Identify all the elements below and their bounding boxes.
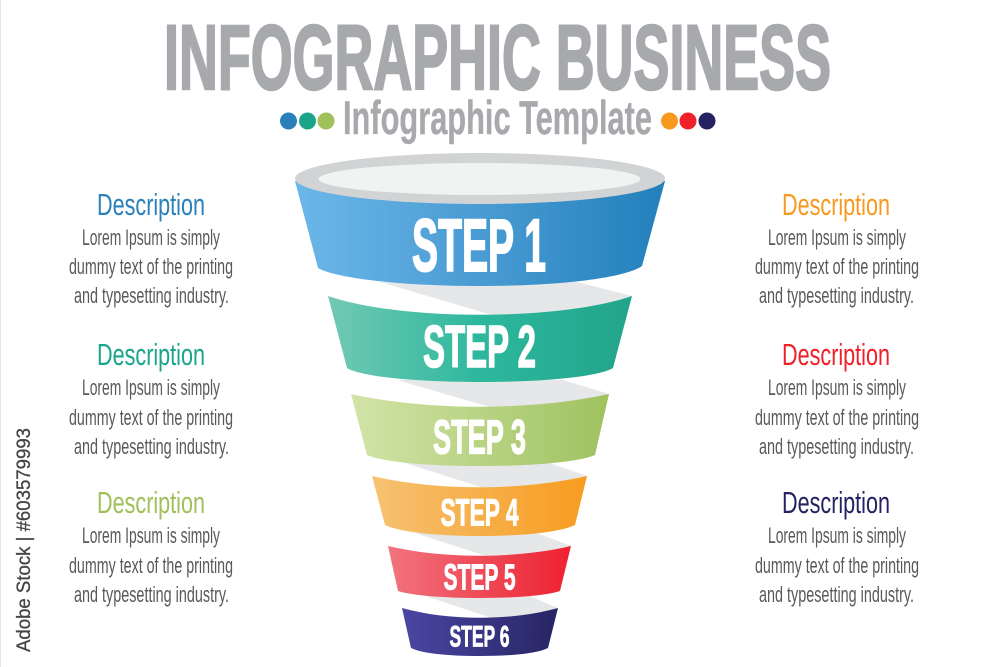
left description 2 bbox=[69, 337, 233, 459]
shadow between steps 2 and 3 bbox=[397, 380, 609, 410]
step 2 band bbox=[328, 296, 632, 382]
body text: dummy text of the printing bbox=[69, 405, 233, 430]
body text: dummy text of the printing bbox=[69, 254, 233, 279]
body text bbox=[755, 375, 919, 459]
heading: Description bbox=[782, 337, 890, 372]
left description 3 bbox=[69, 485, 233, 607]
heading: Description bbox=[97, 187, 205, 222]
subtitle: Infographic Template bbox=[343, 91, 652, 144]
step 1 label: STEP 1 bbox=[412, 204, 546, 287]
body text bbox=[69, 225, 233, 308]
body text bbox=[69, 375, 233, 459]
right description 3 bbox=[755, 485, 919, 607]
funnel rim bbox=[295, 153, 665, 204]
step 5 band bbox=[388, 546, 571, 598]
right description 2 bbox=[755, 337, 919, 459]
body text: and typesetting industry. bbox=[759, 283, 914, 308]
body text: and typesetting industry. bbox=[759, 582, 914, 607]
heading: Description bbox=[782, 187, 890, 222]
stock credit: Adobe Stock | #603579993 bbox=[14, 428, 35, 652]
shadow between steps 5 and 6 bbox=[422, 595, 558, 620]
body text: and typesetting industry. bbox=[74, 283, 229, 308]
funnel bbox=[295, 153, 665, 656]
step 5 label: STEP 5 bbox=[444, 556, 516, 598]
body text: Lorem Ipsum is simply bbox=[768, 375, 906, 400]
heading: Description bbox=[97, 337, 205, 372]
body text: dummy text of the printing bbox=[69, 553, 233, 578]
step 3 label: STEP 3 bbox=[433, 412, 526, 464]
body text: and typesetting industry. bbox=[759, 434, 914, 459]
step 2 label: STEP 2 bbox=[423, 314, 536, 380]
body text: Lorem Ipsum is simply bbox=[768, 225, 906, 250]
subtitle row bbox=[280, 91, 716, 144]
left colour dots bbox=[280, 112, 334, 130]
right description 1 bbox=[755, 187, 919, 308]
body text: Lorem Ipsum is simply bbox=[82, 523, 220, 548]
step 6 label: STEP 6 bbox=[450, 620, 510, 654]
body text: and typesetting industry. bbox=[74, 434, 229, 459]
body text: Lorem Ipsum is simply bbox=[82, 225, 220, 250]
heading: Description bbox=[97, 485, 205, 520]
shadow between steps 3 and 4 bbox=[402, 462, 587, 490]
shadow between steps 4 and 5 bbox=[415, 533, 571, 558]
step 3 band bbox=[351, 394, 609, 466]
body text: and typesetting industry. bbox=[74, 582, 229, 607]
shadow between steps 1 and 2 bbox=[380, 282, 632, 318]
body text: Lorem Ipsum is simply bbox=[82, 375, 220, 400]
body text bbox=[755, 225, 919, 308]
step 4 band bbox=[372, 476, 587, 536]
step 1 band bbox=[295, 153, 665, 287]
right colour dots bbox=[661, 112, 716, 130]
body text: Lorem Ipsum is simply bbox=[768, 523, 906, 548]
funnel opening bbox=[318, 163, 640, 195]
body text bbox=[69, 523, 233, 607]
step 6 band bbox=[402, 608, 558, 656]
body text bbox=[755, 523, 919, 607]
left description 1 bbox=[69, 187, 233, 308]
step 4 label: STEP 4 bbox=[440, 492, 518, 534]
heading: Description bbox=[782, 485, 890, 520]
